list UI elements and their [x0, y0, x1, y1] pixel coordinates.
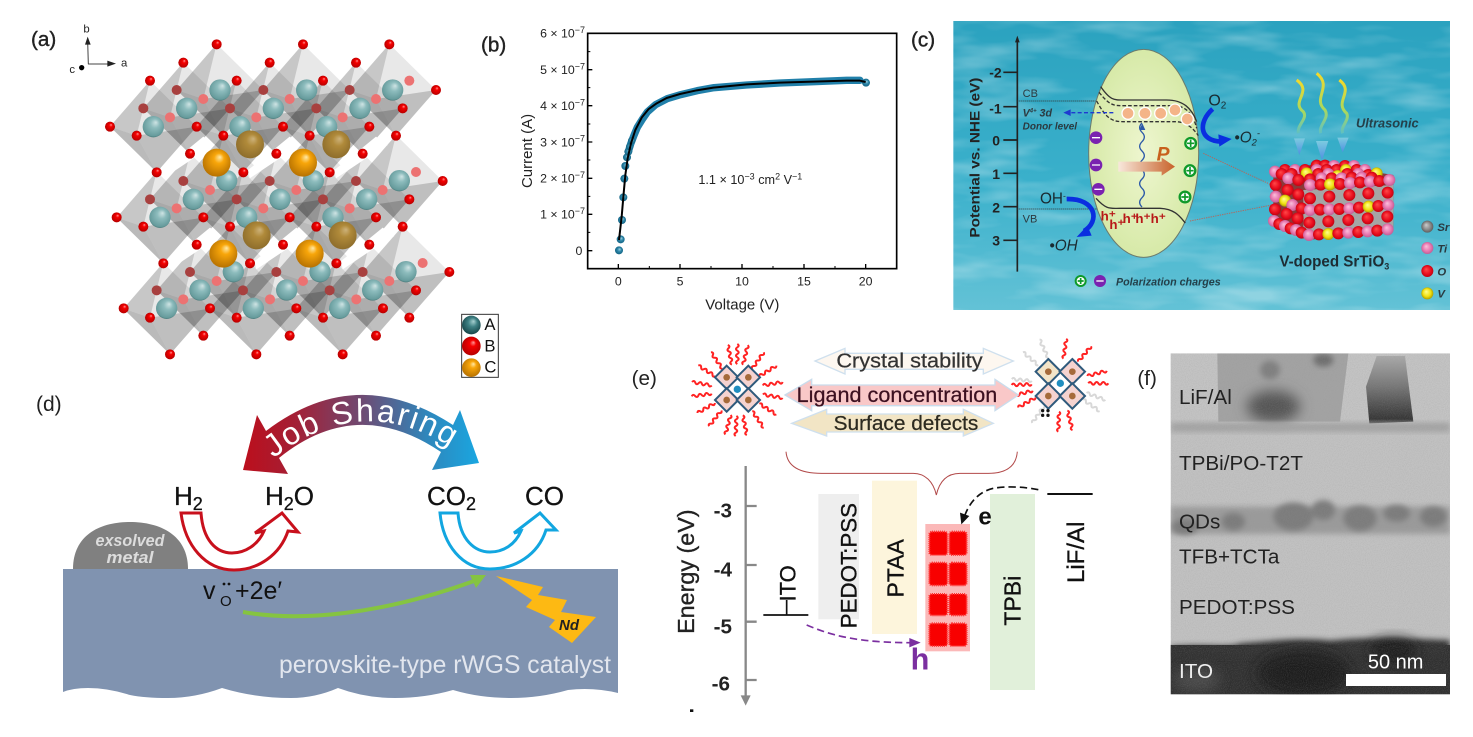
holes: h⁺ [1109, 217, 1125, 232]
ligand concentration arrow: Ligand concentration [797, 383, 997, 407]
left nanocrystal with dense ligands [692, 344, 783, 436]
hydroxyl reaction arrow [1040, 190, 1093, 254]
ultrasonic waves: Ultrasonic [1356, 115, 1419, 130]
stray mark [690, 709, 693, 712]
crystal stability arrow: Crystal stability [836, 350, 984, 372]
panel label (a): (a) [31, 28, 56, 51]
H2 to H2O reaction [174, 481, 314, 570]
energy axis: -6 [712, 673, 730, 696]
x axis title: Voltage (V) [705, 296, 779, 313]
B atoms (red) [105, 39, 454, 359]
polarization arrow: P [1157, 144, 1170, 165]
panel d: job sharing rWGS catalyst [36, 393, 618, 698]
SrTiO3 crystal block [1268, 160, 1395, 241]
Nd lightning bolt: Nd [559, 617, 580, 634]
crystal name: 3 [1384, 262, 1389, 272]
LiF/Al level: LiF/Al [1063, 522, 1090, 583]
exsolved metal particle: exsolved [96, 531, 165, 550]
y axis tick labels: 5 × 10 [540, 63, 575, 77]
H2 to H2O reaction: H [265, 481, 284, 511]
y axis tick labels: 1 × 10 [540, 208, 575, 222]
crystal axes [69, 23, 128, 76]
TEM image [1170, 353, 1450, 694]
electron injection arrow [960, 487, 1038, 530]
scale bar [1346, 651, 1446, 686]
oxygen reaction arrow: 2 [1221, 101, 1227, 112]
catalyst substrate: perovskite-type rWGS catalyst [279, 651, 611, 679]
element legend: Ti [1437, 243, 1448, 255]
y axis tick labels: −7 [575, 206, 585, 216]
water background [953, 21, 1450, 310]
excited electrons [1122, 104, 1193, 125]
y axis tick labels: −7 [575, 61, 585, 71]
crystal axes: c [69, 64, 75, 76]
panel label (c): (c) [911, 29, 935, 52]
potential axis: 1 [992, 166, 1000, 182]
polarization charges legend [1076, 275, 1221, 289]
crystal stability arrow [815, 348, 1013, 374]
y axis tick labels: 4 × 10 [540, 99, 575, 113]
octahedra framework [110, 44, 449, 354]
polarization arrow [1118, 144, 1175, 176]
fit curve [619, 81, 866, 240]
mobility annotation: 2 [775, 171, 780, 181]
x axis tick labels [615, 274, 873, 288]
holes [1101, 209, 1166, 232]
panel c: V-doped SrTiO3 piezocatalysis [911, 21, 1450, 310]
potential axis: -1 [989, 100, 1002, 116]
crystal name: V-doped SrTiO [1279, 254, 1388, 271]
energy axis: -4 [714, 559, 733, 582]
C atoms (gold) [203, 130, 357, 268]
oxygen vacancy label: O [220, 593, 232, 610]
potential axis: Potential vs. NHE (eV) [966, 78, 982, 238]
holes: h⁺ [1135, 211, 1151, 226]
CO2 to CO reaction [427, 481, 564, 569]
oxygen vacancy label: +2e′ [235, 577, 282, 605]
potential axis [966, 36, 1020, 272]
scale bar: 50 nm [1368, 651, 1423, 673]
TPBi layer [990, 494, 1035, 690]
band level labels: 3d [1037, 107, 1052, 119]
layer labels: QDs [1179, 510, 1220, 533]
polarization charges [1090, 131, 1196, 202]
polarization charges legend: Polarization charges [1116, 277, 1221, 289]
exsolved metal particle [73, 522, 188, 569]
oxygen reaction arrow: - [1257, 128, 1260, 138]
PEDOT:PSS layer [818, 494, 862, 628]
exsolved metal particle: metal [106, 548, 155, 567]
data points [615, 79, 870, 254]
energy axis: Energy (eV) [673, 509, 699, 634]
y axis tick labels: −7 [575, 97, 585, 107]
panel label (b): (b) [481, 34, 506, 57]
layer labels: PEDOT:PSS [1179, 596, 1295, 619]
hydroxyl reaction arrow: OH [1040, 191, 1063, 208]
hydroxyl reaction arrow: - [1063, 190, 1066, 200]
potential axis: 3 [992, 233, 1000, 249]
x axis tick labels: 15 [797, 274, 811, 288]
job sharing double arrow: Job Sharing [266, 398, 457, 456]
ligand concentration arrow [785, 379, 1018, 411]
ITO level: ITO [776, 565, 801, 601]
hydroxyl reaction arrow: •OH [1049, 237, 1079, 254]
panel f: TEM cross section [1137, 353, 1450, 697]
oxygen vacancy label: v [203, 577, 216, 605]
element legend: V [1437, 289, 1446, 301]
band level labels [1017, 88, 1097, 225]
LiF/Al level [1047, 494, 1093, 583]
layer labels [1179, 386, 1303, 683]
holes: h⁺ [1101, 209, 1116, 224]
y axis tick labels: −7 [575, 25, 585, 35]
x axis tick labels: 10 [735, 274, 749, 288]
A atoms (teal) [143, 79, 417, 319]
potential axis: 0 [992, 133, 1000, 149]
panel e: ligand effects and energy diagram [632, 339, 1108, 712]
crystal axes: b [83, 23, 90, 35]
panel a: perovskite crystal structure [31, 23, 498, 377]
energy axis [673, 466, 757, 706]
potential axis: -2 [989, 64, 1002, 80]
green electron transfer arrow [243, 575, 486, 616]
hole injection arrow [807, 625, 929, 676]
x axis tick labels: 0 [615, 274, 622, 288]
excitation wavy arrow [1139, 123, 1145, 207]
CO2 to CO reaction: 2 [466, 494, 476, 514]
layer labels: ITO [1179, 660, 1213, 683]
x axis tick labels: 5 [677, 274, 684, 288]
mobility annotation: 1.1 × 10 [698, 173, 744, 187]
atom legend: B [484, 337, 495, 356]
quantum dot layer [925, 524, 970, 651]
y axis tick labels: 6 × 10 [540, 27, 575, 41]
oxygen reaction arrow: •O [1234, 129, 1252, 146]
y axis title: Current (A) [519, 114, 536, 188]
band level labels: 4+ [1029, 108, 1037, 114]
PTAA layer [872, 481, 917, 634]
y axis tick labels: −7 [575, 170, 585, 180]
mobility annotation: −1 [792, 171, 802, 181]
faded B atoms seen through octahedra [138, 76, 428, 304]
element legend [1421, 221, 1450, 301]
element legend: O [1437, 266, 1446, 278]
layer labels: TPBi/PO-T2T [1179, 452, 1303, 475]
connector lines [1190, 153, 1272, 221]
PTAA layer: PTAA [882, 539, 908, 597]
oxygen reaction arrow [1203, 92, 1260, 148]
energy axis: -5 [714, 615, 732, 638]
atom legend: C [484, 358, 496, 377]
electron injection arrow: e [978, 503, 992, 530]
x axis tick labels: 20 [859, 274, 873, 288]
y axis tick labels: 2 × 10 [540, 172, 575, 186]
crystal axes: a [121, 58, 128, 70]
holes: h⁺ [1123, 211, 1138, 226]
hole injection arrow: h [911, 642, 929, 676]
CO2 to CO reaction: CO [427, 481, 466, 511]
TPBi layer: TPBi [1000, 576, 1026, 626]
oxygen reaction arrow: O [1208, 92, 1221, 109]
Nd lightning bolt [496, 576, 596, 643]
y axis tick labels: −7 [575, 134, 585, 144]
CO2 to CO reaction: CO [525, 481, 564, 511]
y axis tick labels: 3 × 10 [540, 135, 575, 149]
ultrasonic waves [1294, 73, 1419, 160]
panel label (e): (e) [632, 367, 657, 390]
atom legend [462, 314, 498, 377]
mobility annotation: −3 [744, 171, 755, 181]
chart frame and ticks [588, 33, 897, 269]
band level labels: Donor level [1023, 121, 1077, 132]
layer labels: LiF/Al [1179, 386, 1232, 409]
band level labels: CB [1023, 88, 1038, 100]
layer labels: TFB+TCTa [1179, 545, 1280, 568]
H2 to H2O reaction: O [294, 481, 314, 511]
surface defects arrow [792, 409, 993, 436]
H2 to H2O reaction: H [174, 481, 193, 511]
potential axis: 2 [992, 199, 1000, 215]
band level labels: V [1023, 107, 1030, 119]
mobility annotation: cm [755, 173, 775, 187]
y axis tick labels: 0 [575, 244, 582, 258]
oxygen vacancy label [203, 577, 282, 610]
H2 to H2O reaction: 2 [193, 494, 203, 514]
oxygen reaction arrow: 2 [1251, 138, 1258, 148]
PEDOT:PSS layer: PEDOT:PSS [837, 503, 862, 628]
holes: h⁺ [1151, 211, 1166, 226]
panel label (d): (d) [36, 393, 62, 416]
ITO level [763, 565, 808, 615]
energy axis: -3 [714, 500, 732, 523]
panel label (f): (f) [1137, 367, 1157, 390]
mobility annotation: V [780, 173, 793, 187]
electron transfer dashed arrow [1063, 109, 1113, 116]
H2 to H2O reaction: 2 [284, 494, 294, 514]
catalyst substrate [63, 569, 618, 698]
particle ellipse with bands [1089, 49, 1199, 257]
panel b: current-voltage chart [481, 25, 897, 313]
surface defects arrow: Surface defects [834, 413, 978, 435]
element legend: Sr [1437, 222, 1450, 234]
y axis tick labels [540, 25, 585, 258]
atom legend: A [484, 315, 496, 334]
curly brace [786, 452, 1017, 495]
band level labels: VB [1023, 213, 1037, 225]
right nanocrystal with fewer ligands [1012, 339, 1108, 432]
